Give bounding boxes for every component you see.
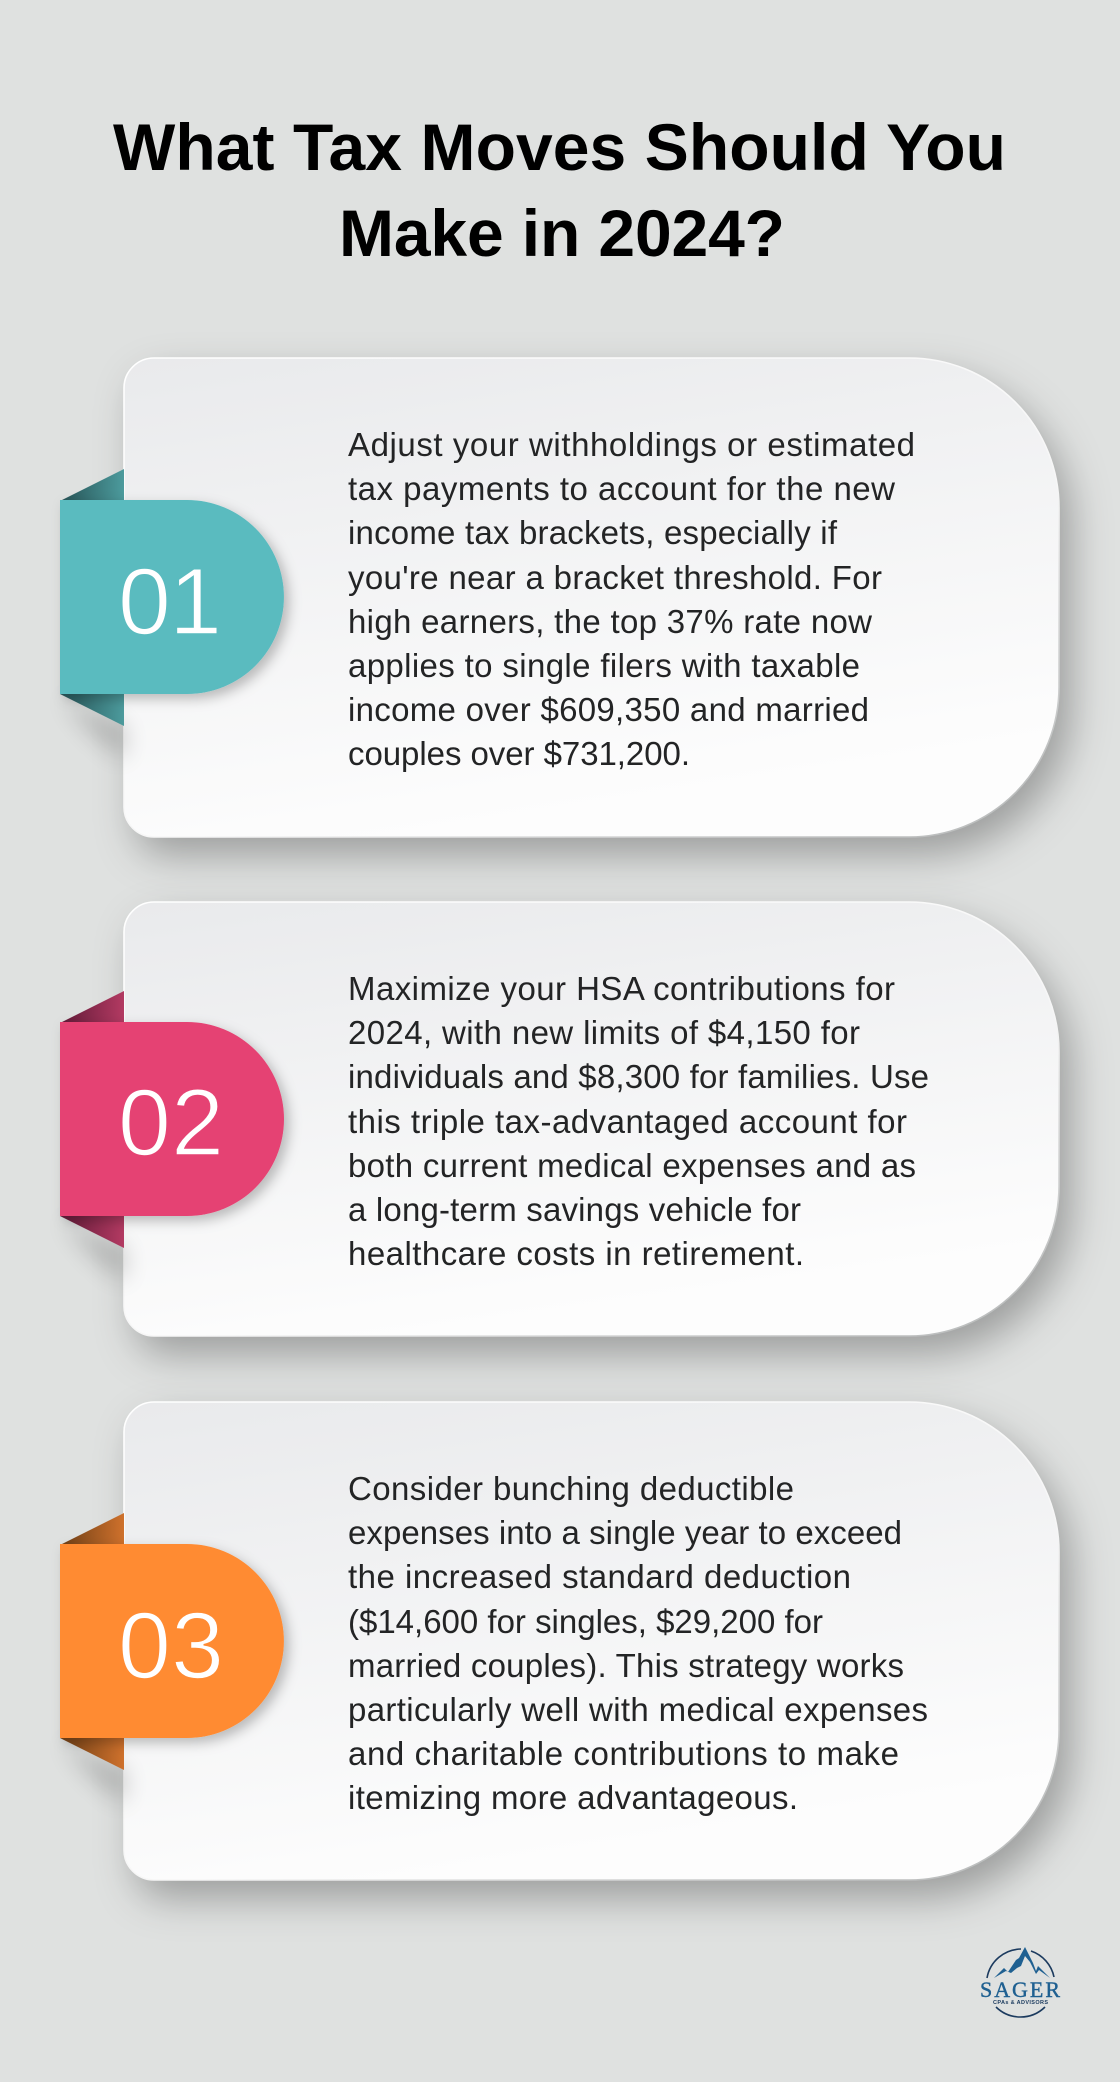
body text 03: married couples). This strategy works <box>348 1647 904 1684</box>
body text 03: expenses into a single year to exceed <box>348 1514 902 1551</box>
card 02 background <box>124 902 1059 1336</box>
card 03 background <box>124 1402 1059 1880</box>
body text 01: you're near a bracket threshold. For <box>348 559 882 596</box>
ribbon fold shadow 01 <box>62 696 124 760</box>
body text 01: income tax brackets, especially if <box>348 514 838 551</box>
body text 02: Maximize your HSA contributions for <box>348 970 895 1007</box>
body text 01: tax payments to account for the new <box>348 470 895 507</box>
number 02: 02 <box>118 1070 224 1176</box>
card 01 background <box>124 358 1059 837</box>
body text 03: ($14,600 for singles, $29,200 for <box>348 1603 823 1640</box>
body text 02 <box>348 970 929 1272</box>
body text 01: high earners, the top 37% rate now <box>348 603 872 640</box>
body text 01 <box>348 426 915 772</box>
ribbon fold bottom 03 <box>60 1738 124 1770</box>
body text 03: Consider bunching deductible <box>348 1470 794 1507</box>
body text 03 <box>348 1470 928 1816</box>
logo tagline: CPAs & ADVISORS <box>993 2000 1048 2006</box>
body text 01: Adjust your withholdings or estimated <box>348 426 915 463</box>
body text 03: itemizing more advantageous. <box>348 1779 798 1816</box>
number badge 02 <box>60 1022 284 1216</box>
panel: step 03 <box>60 1402 1059 1880</box>
body text 02: 2024, with new limits of $4,150 for <box>348 1014 860 1051</box>
body text 02: healthcare costs in retirement. <box>348 1235 804 1272</box>
logo mountain <box>994 1947 1050 1978</box>
body text 03: particularly well with medical expenses <box>348 1691 928 1728</box>
ribbon fold top 03 <box>62 1513 124 1544</box>
panel: step 01 <box>60 358 1059 837</box>
body text 01: income over $609,350 and married <box>348 691 869 728</box>
ribbon fold top 01 <box>62 469 124 500</box>
body text 02: a long-term savings vehicle for <box>348 1191 801 1228</box>
logo: Sager CPAs & Advisors <box>980 1947 1060 2017</box>
number 01: 01 <box>118 549 222 655</box>
ribbon fold shadow 03 <box>62 1740 124 1804</box>
number 03: 03 <box>118 1593 224 1699</box>
ribbon fold bottom 01 <box>60 694 124 726</box>
body text 03: and charitable contributions to make <box>348 1735 899 1772</box>
title <box>113 110 1006 270</box>
number badge 01 <box>60 500 284 694</box>
body text 02: both current medical expenses and as <box>348 1147 916 1184</box>
body text 01: applies to single filers with taxable <box>348 647 860 684</box>
body text 02: this triple tax-advantaged account for <box>348 1103 907 1140</box>
logo ring arcs <box>987 1949 1054 2017</box>
panel: step 02 <box>60 902 1059 1336</box>
number badge 03 <box>60 1544 284 1738</box>
ribbon fold bottom 02 <box>60 1216 124 1248</box>
title: What Tax Moves Should You <box>113 110 1006 184</box>
logo wordmark: SAGER <box>980 1977 1060 2002</box>
body text 03: the increased standard deduction <box>348 1558 851 1595</box>
ribbon fold shadow 02 <box>62 1218 124 1282</box>
body text 01: couples over $731,200. <box>348 735 690 772</box>
title: Make in 2024? <box>339 196 785 270</box>
ribbon fold top 02 <box>62 991 124 1022</box>
body text 02: individuals and $8,300 for families. Use <box>348 1058 929 1095</box>
